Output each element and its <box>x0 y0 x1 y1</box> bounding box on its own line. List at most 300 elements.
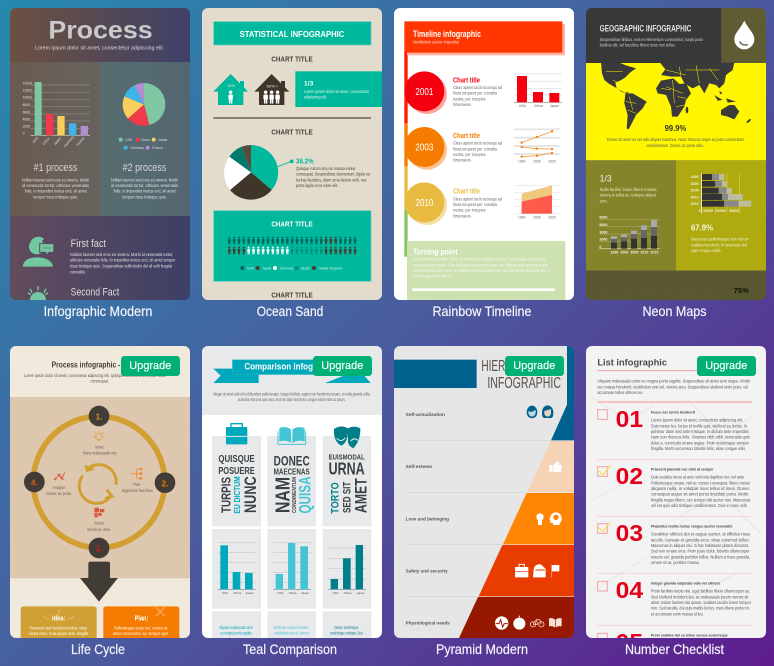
item 01: Lorem ipsum dolor sit amet, consectetur adipiscing elit. <box>651 418 743 423</box>
stacked bar chart: 2010 <box>691 195 699 199</box>
intro text: nec massa hendrerit, vestibulum erat vel, viverra arcu. Suspendisse eleifend enim justo, vel <box>597 384 748 389</box>
item 04: 04 <box>616 577 643 603</box>
item 01: dolor a, commodo ornare augue. Proin scelerisque semper <box>651 440 749 445</box>
icon: open book <box>278 427 306 444</box>
panel: idea box: luctus risus. Cras ipsum ante, fringilla <box>29 631 89 636</box>
panel: process 2 <box>100 62 190 216</box>
item 05: Proin sodales dui eu tellus cursus scelerisque <box>651 633 728 638</box>
bar chart: column 1: China <box>233 591 241 595</box>
bar chart: 14000 <box>23 81 32 85</box>
text: process 1 <box>22 177 89 199</box>
item 02: Pellentesque ornare, nisl ac cursus consequat, libero metus <box>651 480 750 485</box>
word cloud: column 1: QUISQUE <box>218 454 255 465</box>
word cloud: column 1: POSUERE <box>218 466 255 477</box>
item 03: iaculis. Aenean et gravida eros, vitae euismod tellus. <box>651 537 750 542</box>
area chart: 2010: 2000 <box>533 215 541 219</box>
pie legend: China <box>141 138 150 142</box>
button: upgrade: Upgrade <box>513 360 555 372</box>
item 02: 02 <box>616 463 643 489</box>
tier labels: Physiological needs <box>406 621 450 627</box>
caption: Infographic Modern: Infographic Modern <box>44 303 152 319</box>
text: plan: Dignissim faucibus <box>122 488 153 493</box>
title: GEOGRAPHIC INFOGRAPHIC <box>600 24 692 34</box>
caption: Life Cycle: Life Cycle <box>71 641 125 657</box>
column panels <box>212 436 371 641</box>
card: Ocean Sand <box>202 8 382 300</box>
icon: faces <box>527 405 553 418</box>
word cloud: column 3 <box>329 452 371 514</box>
tier labels: Safety and security <box>406 568 448 574</box>
bar chart: 2001 <box>514 74 562 108</box>
area chart: 2010: 1990 <box>518 215 526 219</box>
text block: 2001: himenaeos. <box>453 102 472 107</box>
title: HIER <box>481 358 505 375</box>
text: action <box>87 521 111 532</box>
tier labels: Self-actualization <box>406 412 445 418</box>
stacked bar chart: 0 <box>699 209 701 213</box>
arrow: down <box>80 562 118 602</box>
icon: idea bulb <box>93 431 105 440</box>
header text <box>600 37 703 48</box>
text: 67.9% description: eget congue mollis. <box>691 248 722 253</box>
item 04: et accumsan enim massa id leo. <box>651 611 704 616</box>
text: map caption: Donec sit amet ex vel velit aliquet maximus. Nunc rhoncus turpis ac justo consectetur <box>607 137 744 142</box>
item 01: Fusce nec lorem hendrerit <box>651 410 696 415</box>
text: column 3 note: Donec scelerisque <box>334 625 359 630</box>
word cloud: column 3: SED SIT <box>342 482 354 513</box>
item 01 <box>598 406 750 451</box>
stacked column chart <box>599 216 660 255</box>
item 02: Duis sodales lacus at ante vehicula dapibus nec vel ante. <box>651 475 745 480</box>
title <box>481 358 561 392</box>
text: column 1 note: eu magna porta sagittis <box>220 631 252 636</box>
callout: 1/3 <box>295 71 382 107</box>
pyramid tier: blue <box>551 346 574 440</box>
caption: Number Checklist: Number Checklist <box>625 641 724 657</box>
button: upgrade <box>121 356 180 376</box>
line chart: 2003: 2000 <box>533 160 541 164</box>
word cloud: column 1: NUNC <box>241 476 260 513</box>
item 02: aliquam nulla, in volutpat risus tellus id risus. Donec <box>651 486 750 491</box>
stacked column chart: 5000 <box>599 223 607 227</box>
item 04: Proin facilisis turpis nisi, eget facilisis libero ullamcorper eu. <box>651 589 750 594</box>
word cloud: column 2: DONEC <box>274 452 310 468</box>
item 01: 01 <box>616 406 643 432</box>
item 01: fringilla. Morbi accumsan lobortis felis, vitae congue odio. <box>651 446 746 451</box>
stacked column chart: 6000 <box>599 216 607 220</box>
line chart: 2003 <box>514 129 560 164</box>
icon: dark house: 50% + <box>267 83 279 88</box>
bar chart: column 3 <box>328 545 366 595</box>
stacked bar chart: 10000 <box>703 209 713 213</box>
text block: 2010: himenaeos. <box>453 213 472 218</box>
pictogram legend: Brazil <box>301 266 310 270</box>
bar chart: 12000 <box>23 89 32 93</box>
button: upgrade <box>697 356 756 376</box>
panel: facts <box>10 216 190 300</box>
intro text: consequat. <box>90 379 109 384</box>
pyramid tier: red <box>479 545 574 596</box>
text block: 2001: litora torquent per conubia <box>453 91 498 96</box>
item 02: Praesent placerat nec nibh at semper <box>651 467 714 472</box>
icon: teal house <box>213 74 248 105</box>
text: idea: Idea: <box>95 445 104 450</box>
intro text: at lacinia erat urna quis urna. Sed non diam sed lectus congue rutrum vitae ac ipsum. <box>238 397 345 402</box>
icon: pulse, apple, bike, book <box>495 616 562 630</box>
header block <box>394 360 477 388</box>
text: pie description: porta ligula eros vitae elit. <box>296 183 338 188</box>
panel: turning point: pellentesque nisi ornare at. <box>413 274 452 279</box>
text block: 2001: Class aptent taciti sociosqu ad <box>453 85 502 90</box>
text block: 2001: nostra, per inceptos <box>453 96 486 101</box>
item 02 <box>598 463 750 508</box>
item 05 <box>598 629 728 655</box>
text: action: Morbi ac urna <box>87 527 111 532</box>
word cloud: column 1 <box>218 454 260 514</box>
heading: chart title 4: CHART TITLE <box>271 290 313 299</box>
text: plan <box>122 482 153 493</box>
text block: 2003: Class aptent taciti sociosqu ad <box>453 141 502 146</box>
bar chart: 2000 <box>23 125 30 129</box>
text: pie description <box>296 166 370 188</box>
pie chart <box>123 83 165 126</box>
node 4: 4. <box>31 479 38 488</box>
ribbon title <box>213 360 371 383</box>
panel: idea box: Idea: <box>52 615 65 622</box>
text: pie description: consequat. Suspendisse elementum, ligula eu <box>296 172 370 177</box>
text: 1/3 description: sem. <box>600 198 608 203</box>
icon: action puzzle <box>94 508 104 517</box>
intro text <box>24 373 166 384</box>
header banner: Timeline infographic <box>413 29 481 39</box>
node 2: 2. <box>162 479 168 488</box>
text block: 2003: himenaeos. <box>453 158 472 163</box>
text: column 3 note <box>330 625 363 636</box>
stacked bar chart: 20000 <box>716 209 726 213</box>
pictogram legend <box>240 266 343 270</box>
text: first fact: risus tristique quis. Suspendisse sollicitudin dui id velit feugiat <box>70 263 173 268</box>
text: first fact <box>70 252 176 274</box>
icon: analyse chart <box>54 472 65 480</box>
panel: pictogram chart <box>214 211 371 281</box>
bar chart: column 1: Japan <box>246 591 254 595</box>
text block: 2003: nostra, per inceptos <box>453 152 486 157</box>
stacked bar chart: 2000 <box>691 182 699 186</box>
panel: idea box: Praesent sed hendrerit lectus, vitae <box>30 625 87 630</box>
heading: #2 process: #2 process <box>123 162 166 174</box>
stacked column chart: 2000 <box>620 251 628 255</box>
stat: 75%: 75% <box>734 286 749 295</box>
bar chart: 6000 <box>23 110 30 114</box>
bar chart: 10000 <box>23 96 32 100</box>
item 02: fringilla neque libero, nec tempor nisi auctor non. Maecenas <box>651 497 750 502</box>
node 4 <box>24 472 45 492</box>
bar chart: column 2: USA <box>277 591 283 595</box>
bar chart: Japan <box>53 136 62 146</box>
intro text: rutrum arcu ac massa varius <box>124 373 166 378</box>
tier labels <box>406 412 450 627</box>
text: process 1: Nullam laoreet sed eros eu viverra. Morbi <box>22 177 89 182</box>
item 01: pulvinar diam sed ante tristique, in dictum ante imperdiet. <box>651 429 750 434</box>
word cloud: column 2: QUISA <box>296 476 315 514</box>
node 3 <box>89 538 109 558</box>
item 03: 03 <box>616 520 643 546</box>
stacked column chart: 0 <box>599 245 601 249</box>
item 03: mauris vel, gravida porttitor tellus. Nullam a risus gravida, <box>651 554 750 559</box>
stacked column chart: 1990 <box>610 251 618 255</box>
text: column 2 note <box>274 625 309 636</box>
word cloud: column 1: TURPIS <box>220 477 234 513</box>
pie legend: Japan <box>158 138 168 142</box>
panel: turning point: Donec finibus porttitor diam, et varius dui molestie a. Nunc malesuada nisi id enim <box>413 257 547 262</box>
pie legend: France <box>152 146 163 150</box>
panel: footer bar <box>586 271 766 300</box>
icon: plan tree <box>131 468 142 479</box>
item 01: Duis metus leo, luctus id mollis quis, eleifend eu lectus. In <box>651 423 748 428</box>
panel: process 1 <box>10 62 100 216</box>
pictogram legend: Japan <box>262 266 272 270</box>
pyramid tier: orange <box>503 493 574 544</box>
text block: 2010 <box>453 187 502 218</box>
button: upgrade: Upgrade <box>129 360 171 372</box>
node 3: 3. <box>96 545 102 554</box>
subtitle: Lorem ipsum dolor sit amet, consectetur adipiscing elit. <box>35 45 164 51</box>
text: pie description: lacinia faucibus, diam urna lacinia velit, nec <box>296 177 367 182</box>
word cloud: column 1: EU DICTUM <box>233 476 242 514</box>
item 05: 05 <box>616 629 643 655</box>
text: column 1 note: Aliquam malesuada tortor <box>219 625 253 630</box>
panel: plan box: Plan: <box>135 615 148 622</box>
cycle ring <box>33 416 165 548</box>
text block: 2010: Chart title <box>453 187 480 196</box>
tier labels: Love and belonging <box>406 516 449 522</box>
area chart: 2010 <box>514 185 560 219</box>
heading: chart title 2: CHART TITLE <box>271 128 313 137</box>
card: Infographic Modern <box>10 8 190 308</box>
panel: turning point: Turning point <box>413 246 458 256</box>
item 03: Sed non ornare eros. Proin justo dolor, lobortis ullamcorper <box>651 549 750 554</box>
panel: turning point: Donec ornare odio arcu, et sodales lectus tincidunt vel. Sed dignissim faucibus orci, a <box>413 268 551 273</box>
pictogram legend: United Kingdom <box>319 266 343 270</box>
text: column 3 note: scelerisque volutpat. Sed <box>330 631 363 636</box>
stacked bar chart: 2015 <box>691 202 699 206</box>
text: map caption: condimentum. Donec ac porta odio. <box>646 143 704 148</box>
item 04: non. Sed iaculis, dui quis mattis luctus, risus libero porta mi, <box>651 606 750 611</box>
heading: Second Fact: Second Fact <box>71 286 119 298</box>
card: Teal Comparison <box>202 346 382 641</box>
heading: chart title 1: CHART TITLE <box>271 54 313 63</box>
word cloud: column 3: URNA <box>329 459 365 479</box>
heading: #1 process: #1 process <box>34 162 77 174</box>
header text: facilisis elit, vel faucibus libero risus non tellus. <box>600 43 676 48</box>
word cloud: column 2 <box>271 452 315 514</box>
panel: plan box: amet consectetur ac, tempor eget <box>113 631 169 636</box>
heading: First fact: First fact <box>71 238 106 250</box>
text: 67.9% description: sodales hendrerit. In venenatis nisl <box>691 242 747 247</box>
title: Process infographic - <box>52 359 121 369</box>
line chart: 2003: 2005 <box>548 160 556 164</box>
text block: 2001: Chart title <box>453 75 480 84</box>
text block: 2010: litora torquent per conubia <box>453 202 498 207</box>
text: process 1: id venenatis tortor, ultricies venenatis <box>22 183 89 188</box>
item 04 <box>598 577 751 616</box>
button: upgrade: Upgrade <box>705 360 747 372</box>
bar chart: column 2 <box>273 542 311 595</box>
item 02: consequat augue sit amet purus tincidunt porta. Morbi <box>651 492 748 497</box>
item 03 <box>598 520 750 565</box>
pictogram rows <box>228 237 356 254</box>
item 01: Nam non rhoncus felis. Vivamus nibh nibh, venenatis quis <box>651 435 750 440</box>
panel: plan box <box>103 606 179 643</box>
bar chart: column 1: USA <box>222 591 228 595</box>
text block: 2003: litora torquent per conubia <box>453 146 498 151</box>
pie chart <box>224 145 293 200</box>
bar chart: 0 <box>23 132 25 136</box>
item 03: Phasellus mollis metus congue auctor venenatis <box>651 524 733 529</box>
bar chart: 2001: USA <box>519 104 527 108</box>
intro text: Integer sit amet velit ut leo bibendum pellentesque. Integer facilisis, sapien non hendrerit posuere, ex nulla gravida nulla, <box>213 391 370 396</box>
icon: briefcase, hat, flag <box>515 564 559 577</box>
bar chart: column 2: China <box>289 591 297 595</box>
word cloud: column 2: MAECENAS <box>274 467 310 476</box>
icon: recycle arrows <box>79 465 116 503</box>
text: 67.9% description <box>691 237 749 253</box>
button: upgrade: Upgrade <box>321 360 363 372</box>
card: Neon Maps <box>586 8 766 300</box>
word cloud: column 3: TORTO <box>329 482 341 514</box>
icon: briefcase <box>226 424 247 444</box>
item 04: Integer gravida vulputate odio vel ultrices <box>651 581 721 586</box>
bar chart: Germany <box>63 135 75 148</box>
intro text: Aliquam malesuada tortor eu magna porta sagittis. Suspendisse sit amet sem neque. Morbi <box>597 379 750 384</box>
text: map caption <box>607 137 744 148</box>
bar chart: China <box>42 137 50 146</box>
bar chart: column 1 <box>218 542 256 595</box>
icon: theatre masks <box>334 426 360 448</box>
text: 67.9% description: Maecenas pellentesque sem rutrum <box>691 237 749 242</box>
pyramid tier: peach <box>527 441 574 492</box>
text block: 2001 <box>453 75 502 107</box>
text: process 2: Nullam laoreet sed eros eu viverra. Morbi <box>111 177 178 182</box>
intro text <box>213 391 370 402</box>
text: column 1 note <box>219 625 253 636</box>
header banner: Vestibulum auctor imperdiet <box>413 40 460 45</box>
text: pie description: Quisque rutrum arcu ac massa varius <box>296 166 355 171</box>
stat: 36.2%: 36.2% <box>296 157 314 166</box>
world map <box>601 63 751 129</box>
text: 1/3 description <box>600 187 657 203</box>
word cloud: column 3: EUISMODAL <box>329 452 365 461</box>
word cloud: column 2: NAM <box>271 477 294 513</box>
card: Life Cycle <box>10 346 190 643</box>
panel: turning point <box>407 241 565 300</box>
intro text: accumsan tellus ultrices eu. <box>597 390 643 395</box>
stacked column chart: 2005 <box>630 251 638 255</box>
text: plan: Plan: <box>133 482 141 487</box>
year node: 2003 <box>404 127 447 170</box>
area chart: 2010: 2005 <box>548 215 556 219</box>
text: 1/3 description: Nulla facilisi. Nunc libero massa, <box>600 187 657 192</box>
icon: bulb and head <box>536 512 562 525</box>
stacked column chart: 2000 <box>599 238 607 242</box>
title: List infographic <box>597 358 667 368</box>
icon: teal house: 11% <box>227 83 235 88</box>
line chart: 2003: 1990 <box>518 160 526 164</box>
pie legend: USA <box>125 138 133 142</box>
stat: 1/3: 1/3 <box>600 174 612 184</box>
text: process 1: tempor risus tristique quis. <box>33 194 78 199</box>
stacked column chart: 3000 <box>599 230 607 234</box>
text: action: Action: <box>94 521 105 526</box>
year node: 2003: 2003 <box>415 143 433 154</box>
text block: 2010: nostra, per inceptos <box>453 208 486 213</box>
bar chart: column 2: Japan <box>301 591 309 595</box>
item 03: Maecenas in aliquet nisi. In hac habitasse platea dictumst. <box>651 543 749 548</box>
banner title <box>214 22 371 45</box>
item 04: amet. Etiam laoreet nisi ipsum, sodales iaculis lorem tempor <box>651 600 751 605</box>
tier labels: Self-esteem <box>406 464 433 470</box>
text block: 2010: Class aptent taciti sociosqu ad <box>453 196 502 201</box>
text: process 1: felis. In imperdiet metus orci, sit amet <box>25 189 87 194</box>
timeline line <box>404 50 408 257</box>
text: process 2: tempor risus tristique quis. <box>122 194 167 199</box>
intro text <box>597 379 750 395</box>
item 04: Sed eleifend tincidunt leo, ac malesuada ipsum viverra sit <box>651 594 749 599</box>
stacked bar chart: 30000 <box>729 209 739 213</box>
callout: 1/3: 1/3 <box>304 80 314 87</box>
caption: Ocean Sand: Ocean Sand <box>257 303 323 319</box>
stacked bar chart: 2005 <box>691 189 699 193</box>
word cloud: column 2: CONDIMENTUM <box>292 477 298 513</box>
item 02: vel est quis odio tristique condimentum. Duis in nunc velit. <box>651 503 748 508</box>
panel: stats right <box>676 160 766 271</box>
header text: Suspendisse finibus, erat et elementum consectetur, turpis justo <box>600 37 703 42</box>
text: column 2 note: vestibulum erat vel, viverra <box>274 631 309 636</box>
text: first fact: ultricies venenatis felis. In imperdiet metus orci, sit amet tempor <box>70 258 176 263</box>
bar chart: USA <box>32 136 40 144</box>
button: upgrade <box>505 356 564 376</box>
bar chart <box>23 81 90 148</box>
node 1 <box>89 406 109 426</box>
year node: 2001 <box>404 71 447 114</box>
icon: dark house <box>254 74 289 105</box>
text: analyse <box>46 485 71 496</box>
icon: light bulb <box>28 286 48 300</box>
caption: Teal Comparison: Teal Comparison <box>243 641 337 657</box>
caption: Rainbow Timeline: Rainbow Timeline <box>432 303 532 319</box>
node 1: 1. <box>96 413 102 422</box>
text: column 2 note: Morbi nec massa hendrerit, <box>274 625 309 630</box>
pictogram legend: Germany <box>280 266 294 270</box>
text: analyse: Analyse: <box>52 485 66 490</box>
callout: 1/3: Lorem ipsum dolor sit amet, consectetur <box>304 89 369 94</box>
year node: 2010: 2010 <box>415 198 433 209</box>
year node: 2010 <box>404 182 447 225</box>
icon: support agent <box>23 237 54 267</box>
card: Rainbow Timeline <box>394 8 574 300</box>
text: first fact: Nullam laoreet sed eros eu viverra. Morbi id venenatis tortor, <box>70 252 173 257</box>
pictogram legend: USA <box>247 266 255 270</box>
title: Process: Process <box>48 17 153 45</box>
panel: stats left <box>586 160 676 271</box>
stacked column chart: 2015 <box>650 251 658 255</box>
bar chart: 2001: China <box>534 104 543 108</box>
panel: idea box <box>21 606 97 643</box>
caption: Pyramid Modern: Pyramid Modern <box>436 641 528 657</box>
word cloud: column 3: AMET <box>352 478 371 513</box>
text: analyse: Donec ac porta <box>46 491 71 496</box>
item 03: Curabitur ultrices dui et augue auctor, ut efficitur risus <box>651 532 750 537</box>
